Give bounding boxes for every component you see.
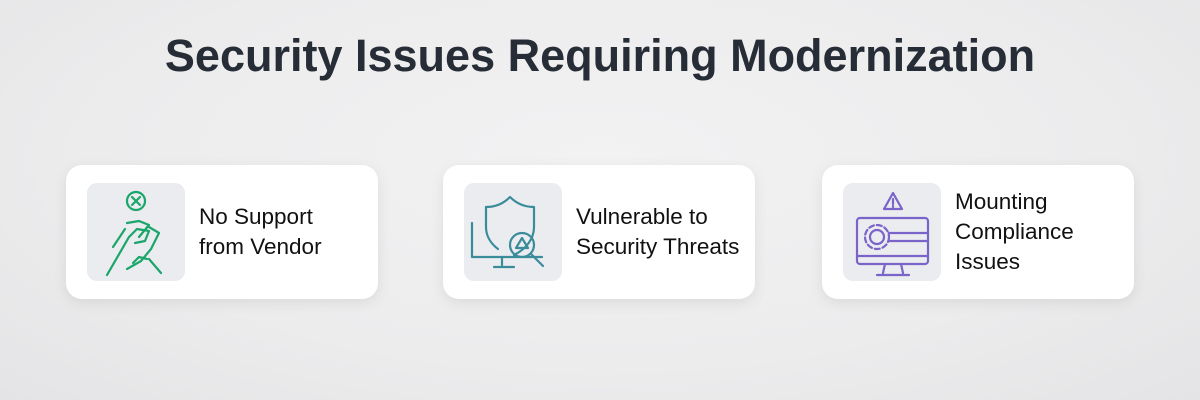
text: No Support (199, 204, 313, 229)
icon: handshake (87, 183, 185, 281)
card: compliance (822, 165, 1134, 299)
card: no support (66, 165, 378, 299)
text: Compliance (955, 219, 1074, 244)
icon: monitor gear warning (843, 183, 941, 281)
icon: shield monitor (464, 183, 562, 281)
text: Security Threats (576, 234, 739, 259)
text (199, 204, 322, 259)
card: vulnerable (443, 165, 755, 299)
text: Vulnerable to (576, 204, 708, 229)
text (955, 189, 1074, 274)
text: from Vendor (199, 234, 322, 259)
text: Issues (955, 249, 1020, 274)
text: Mounting (955, 189, 1048, 214)
text (576, 204, 739, 259)
title: Security Issues Requiring Modernization (165, 30, 1035, 81)
